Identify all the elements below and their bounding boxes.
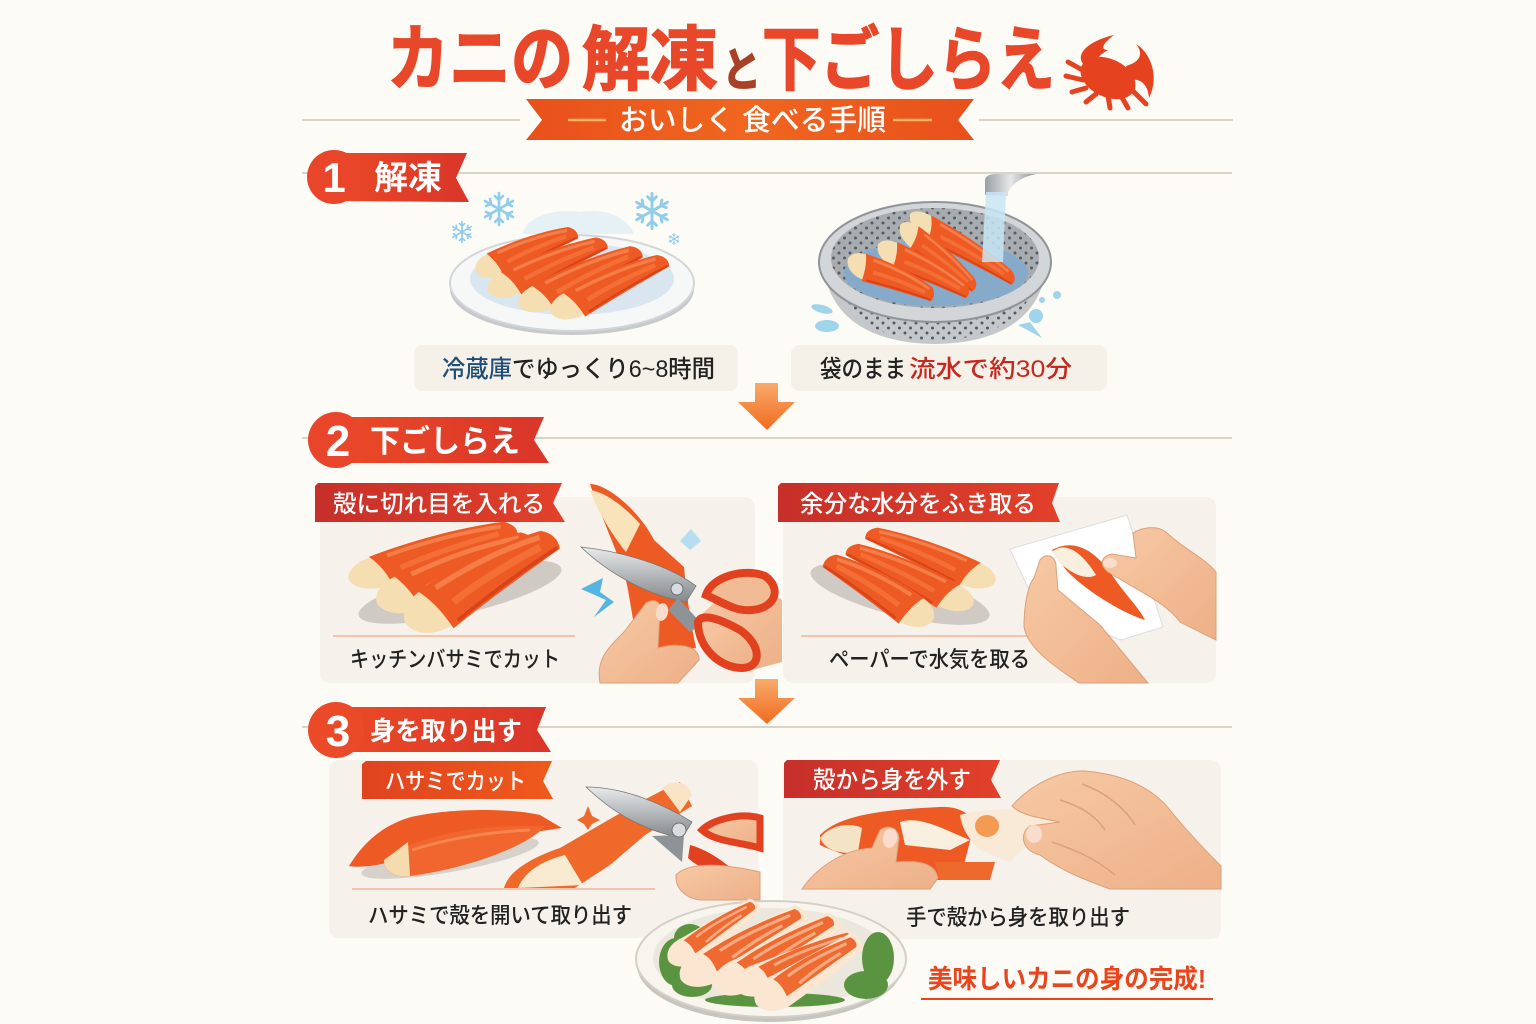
faucet xyxy=(985,174,1036,196)
subtitle banner: おいしく 食べる手順 xyxy=(619,104,886,137)
icon: blue spark xyxy=(581,578,614,617)
section 3 heading: 身を取り出す xyxy=(370,716,522,746)
blades xyxy=(581,547,696,602)
hand back xyxy=(690,588,782,672)
icon: ice shard xyxy=(680,529,701,550)
arrow: step 1 to 2 xyxy=(738,383,795,430)
caption: ハサミで殻を開いて取り出す xyxy=(368,903,632,928)
hand front xyxy=(599,601,699,683)
icon: crab xyxy=(1066,35,1154,108)
illustration: finished plate of crab meat xyxy=(636,896,906,1022)
claw xyxy=(590,484,696,650)
title: 下ごしらえ xyxy=(762,21,1055,99)
section 1 rule xyxy=(302,172,1232,174)
label: ハサミでカット xyxy=(385,768,526,794)
crab meat pieces xyxy=(660,896,873,1019)
lettuce xyxy=(659,924,894,1007)
title: カニの xyxy=(387,20,573,100)
panel: remove meat from shell xyxy=(783,760,1221,939)
arrow: step 2 to 3 xyxy=(738,679,795,724)
crab legs in bag xyxy=(842,202,1020,315)
section 3 rule xyxy=(302,726,1232,728)
label: 殻から身を外す xyxy=(813,767,971,794)
water splashes xyxy=(810,291,1061,338)
caption: 手で殻から身を取り出す xyxy=(906,905,1130,930)
illustration: hand with scissors cutting claw xyxy=(581,484,782,683)
label: 余分な水分をふき取る xyxy=(800,491,1036,518)
title xyxy=(387,20,1055,100)
section 2 rule xyxy=(302,437,1232,439)
caption: running water thaw xyxy=(791,345,1107,391)
caption: refrigerator thaw xyxy=(414,345,738,391)
caption: キッチンバサミでカット xyxy=(350,647,560,672)
panel: cut slits in shell xyxy=(315,483,782,683)
fingernail xyxy=(1103,558,1117,568)
section 3 heading xyxy=(308,702,551,758)
illustration: crab legs thawing on plate xyxy=(450,193,694,335)
section 1 heading: 解凍 xyxy=(374,159,442,196)
completion message: 美味しいカニの身の完成! xyxy=(928,964,1206,994)
section 3 heading: 3 xyxy=(326,707,350,756)
label xyxy=(784,760,1001,798)
finger creases xyxy=(1052,784,1135,875)
section 1 heading xyxy=(307,150,469,204)
panel: cut with scissors xyxy=(329,760,760,938)
crab legs xyxy=(470,223,676,327)
subtitle banner xyxy=(526,99,974,140)
caption: ペーパーで水気を取る xyxy=(829,647,1030,672)
fingernails xyxy=(881,825,1042,849)
title: 解凍 xyxy=(582,21,718,99)
subtitle divider right xyxy=(979,119,1233,121)
water stream xyxy=(982,192,1006,262)
illustration: crab legs xyxy=(349,810,562,887)
colander xyxy=(819,202,1051,344)
divider xyxy=(801,635,1030,637)
section 2 heading xyxy=(308,412,549,468)
illustration: opened shell with scissors xyxy=(504,782,760,900)
frost cloud xyxy=(522,211,634,234)
divider xyxy=(333,635,575,637)
plate xyxy=(450,235,694,335)
section 2 heading: 下ごしらえ xyxy=(370,424,520,459)
illustration: crab legs in colander under running water xyxy=(810,174,1061,344)
fingernail xyxy=(654,602,670,622)
label: 殻に切れ目を入れる xyxy=(333,491,545,518)
caption: running water thaw: 流水で約30分 xyxy=(909,356,1072,383)
section 1 heading: 1 xyxy=(322,154,346,201)
scissor handles xyxy=(706,573,775,610)
title: と xyxy=(722,44,761,96)
plate xyxy=(636,901,906,1022)
divider xyxy=(352,888,655,890)
label xyxy=(778,483,1060,522)
subtitle divider left xyxy=(302,119,520,121)
illustration: hands pulling meat from shell xyxy=(802,771,1221,889)
label xyxy=(315,483,565,522)
illustration: hands with paper towel xyxy=(1010,515,1216,683)
illustration: crab legs xyxy=(805,523,1001,638)
label xyxy=(362,761,553,799)
caption: refrigerator thaw: 冷蔵庫 xyxy=(442,356,512,383)
caption: running water thaw: 袋のまま xyxy=(820,356,906,383)
illustration: crab legs xyxy=(343,517,573,645)
panel: wipe off excess water xyxy=(778,483,1216,683)
icon: snowflakes xyxy=(453,193,679,245)
section 2 heading: 2 xyxy=(326,417,350,466)
caption: refrigerator thaw: でゆっくり6~8時間 xyxy=(512,356,715,383)
